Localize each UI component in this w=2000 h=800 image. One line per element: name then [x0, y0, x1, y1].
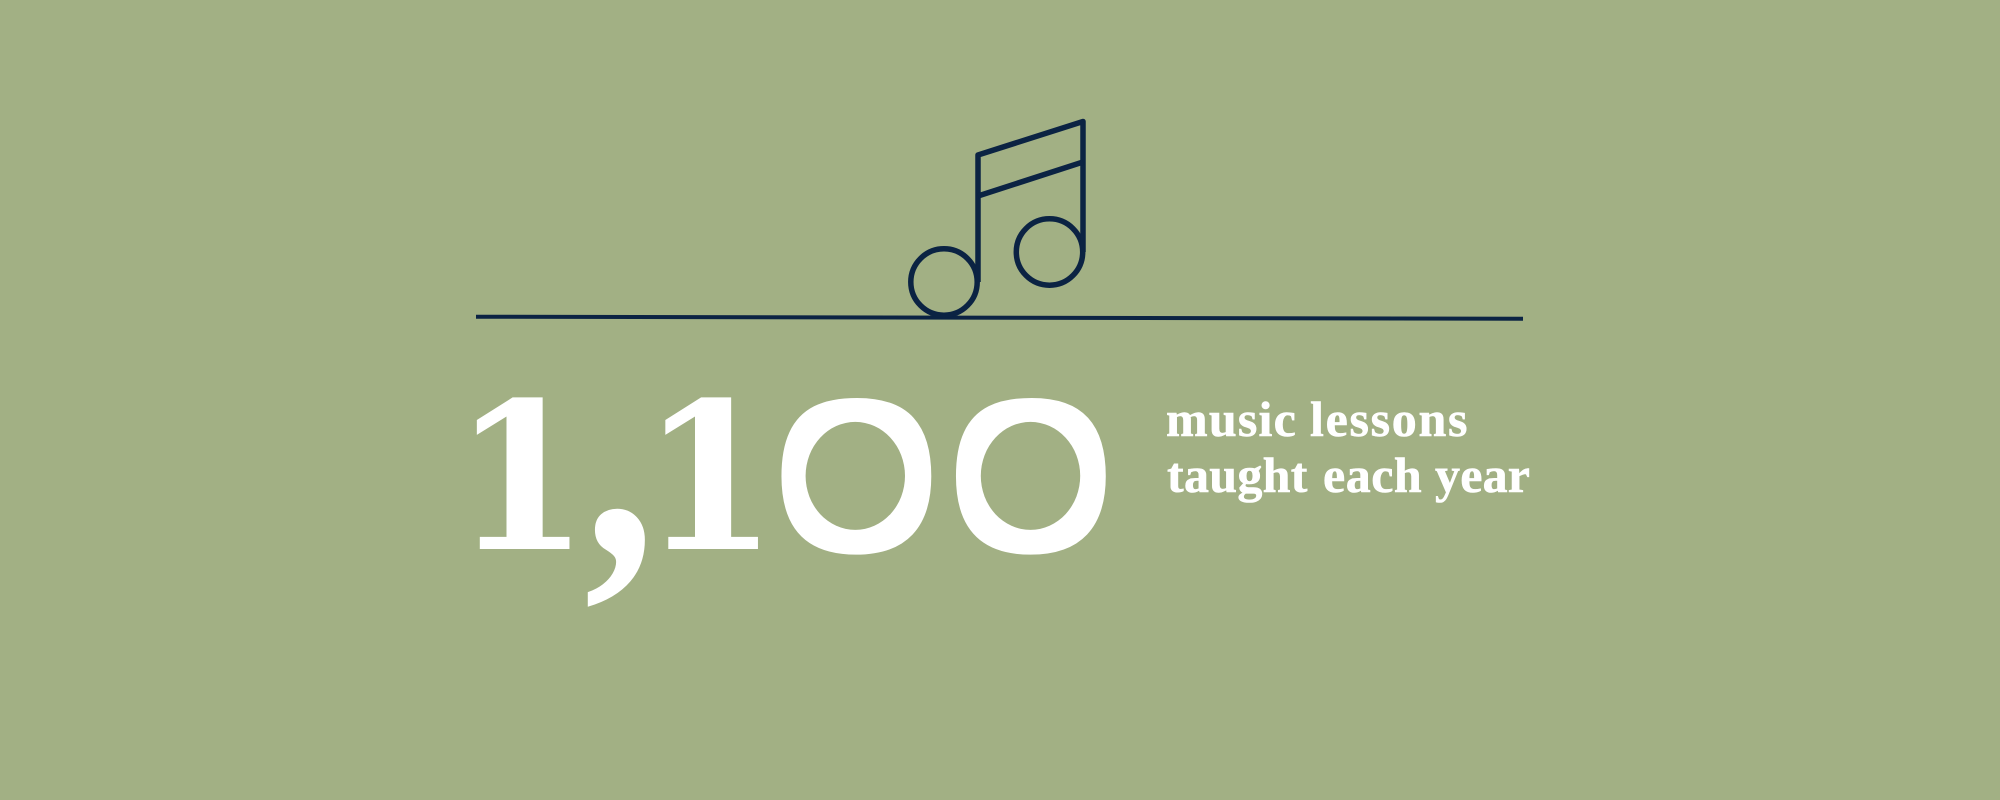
- caption: taught: [1167, 447, 1308, 503]
- big number: 1,100: 1: [453, 358, 589, 598]
- caption: lessons: [1310, 391, 1469, 447]
- caption: each: [1323, 447, 1422, 503]
- icon: music note: [911, 122, 1083, 315]
- caption: music: [1166, 391, 1297, 447]
- caption: [1166, 391, 1530, 503]
- caption: year: [1435, 447, 1530, 503]
- big number: 1,100: ,: [584, 268, 656, 627]
- baseline rule: [476, 317, 1523, 319]
- big number: 1,100: 0: [946, 355, 1116, 598]
- big number: 1,100: 0: [772, 355, 942, 598]
- big number: 1,100: [453, 268, 1116, 627]
- big number: 1,100: 1: [642, 358, 777, 598]
